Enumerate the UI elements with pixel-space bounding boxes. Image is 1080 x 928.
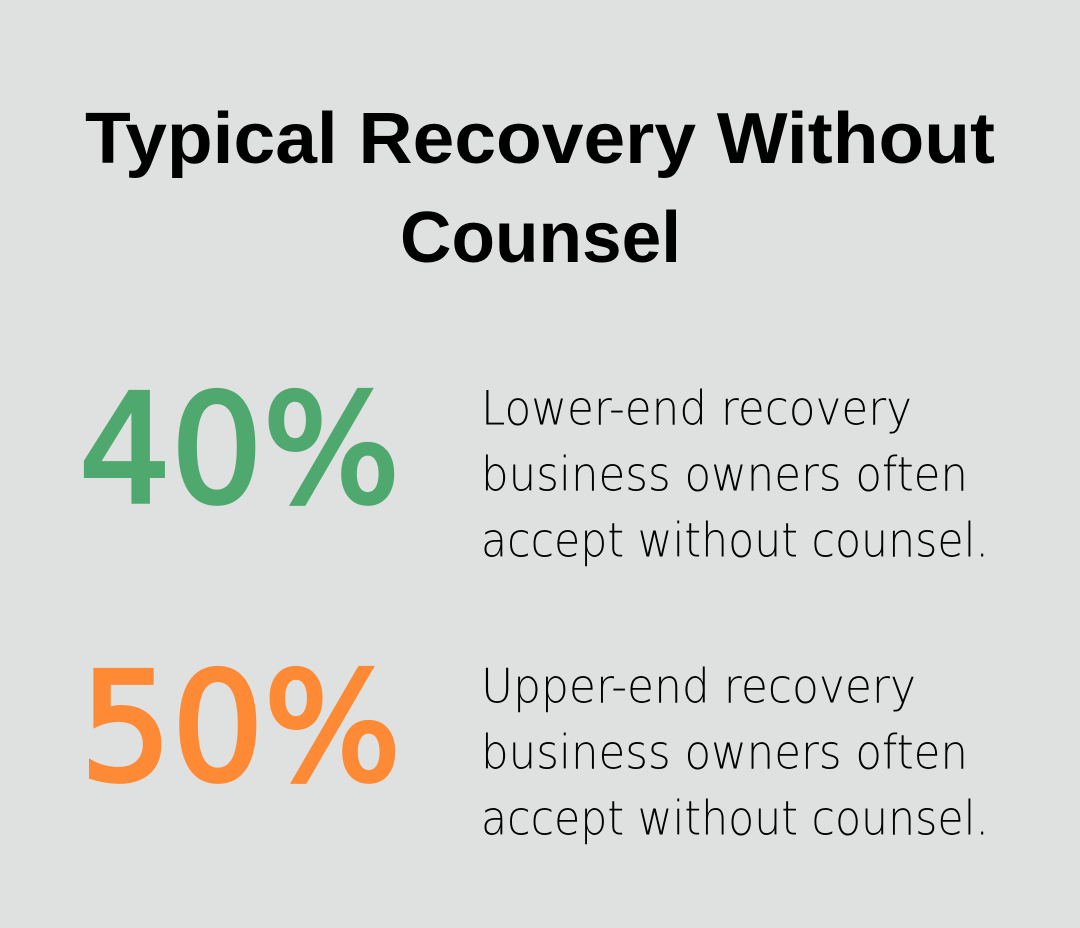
description: upper-end recovery: business owners often xyxy=(481,726,968,780)
title: Counsel xyxy=(400,198,681,278)
title xyxy=(85,99,995,278)
description: lower-end recovery: accept without counsel. xyxy=(481,514,989,568)
title: Typical Recovery Without xyxy=(85,99,995,179)
description: lower-end recovery: business owners often xyxy=(481,448,968,502)
description: upper-end recovery: accept without counsel. xyxy=(481,792,989,846)
description: upper-end recovery: Upper-end recovery xyxy=(481,660,916,714)
description: lower-end recovery: Lower-end recovery xyxy=(481,382,912,436)
stat: 40%: 40% xyxy=(79,364,400,538)
description: lower-end recovery xyxy=(481,382,989,568)
description: upper-end recovery xyxy=(481,660,989,846)
stat: 50%: 50% xyxy=(80,642,401,816)
